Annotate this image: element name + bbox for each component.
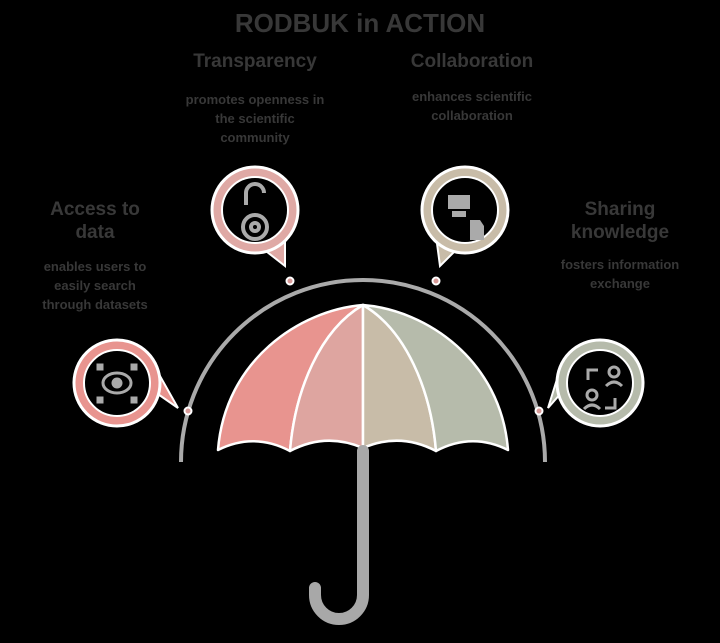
heading: Access to data (50, 199, 140, 243)
icon: documents (448, 195, 484, 240)
umbrella handle (315, 451, 363, 619)
text: access: enables users to easily search through datasets (42, 259, 148, 312)
bubble: collaboration (422, 167, 508, 266)
text: transparency: community (220, 130, 290, 145)
text: sharing: fosters information exchange (561, 257, 679, 291)
text: collaboration: enhances scientific collaboration (412, 89, 532, 123)
bubble: access (74, 340, 178, 426)
dots (184, 278, 542, 414)
umbrella canopy (218, 305, 508, 451)
text: transparency (186, 92, 324, 145)
icon: open padlock (243, 184, 267, 239)
bubble: transparency (212, 167, 298, 266)
bubble: sharing (548, 340, 643, 426)
text: transparency: promotes openness in (186, 92, 324, 107)
heading: Transparency: Transparency (193, 51, 317, 72)
heading: Access to data: data (75, 222, 115, 243)
arc (181, 280, 545, 462)
heading: Access to data: Access to (50, 199, 140, 220)
heading: Sharing knowledge (571, 199, 669, 243)
heading: Collaboration: Collaboration (411, 51, 533, 72)
text: transparency: the scientific (215, 111, 295, 126)
icon: search data (97, 364, 137, 403)
icon: exchange (584, 367, 622, 409)
title: RODBUK in ACTION (235, 8, 485, 38)
heading: Sharing knowledge: knowledge (571, 222, 669, 243)
heading: Sharing knowledge: Sharing (585, 199, 655, 220)
